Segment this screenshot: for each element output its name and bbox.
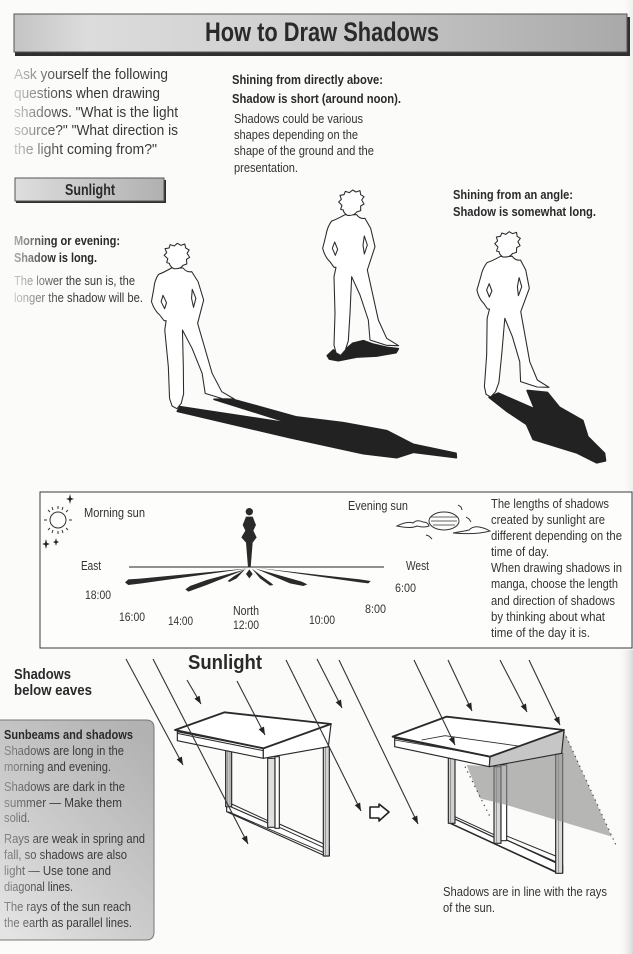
compass and hour labels: 14:00 xyxy=(168,616,193,628)
diagram explanation text: by thinking about what xyxy=(491,609,605,624)
intro text: Ask yourself the following xyxy=(14,66,168,83)
compass and hour labels: East xyxy=(81,558,101,573)
text: shining from directly above: Shadows could be various xyxy=(234,111,363,126)
panel: sunbeams and shadows: Sunbeams and shadows xyxy=(4,728,133,742)
diagram explanation text: and direction of shadows xyxy=(491,593,615,608)
panel: sunbeams and shadows: The rays of the sun reach xyxy=(4,899,131,914)
radial shadows by hour xyxy=(125,568,371,592)
diagram explanation text: time of the day it is. xyxy=(491,625,590,640)
compass and hour labels: 18:00 xyxy=(85,590,111,602)
panel: sunbeams and shadows: Shadows are dark in the xyxy=(4,779,125,794)
figure with medium shadow xyxy=(473,232,605,463)
compass and hour labels: 16:00 xyxy=(119,612,145,624)
compass and hour labels: 10:00 xyxy=(309,615,335,627)
panel: sunbeams and shadows: fall, so shadows are also xyxy=(4,847,127,862)
title banner: How to Draw Shadows xyxy=(205,17,439,47)
compass and hour labels: 6:00 xyxy=(395,583,416,595)
text: shining from directly above xyxy=(232,73,401,175)
sunlight label bar: Sunlight xyxy=(65,182,116,199)
label: evening sun: Evening sun xyxy=(348,498,408,513)
diagram explanation text: created by sunlight are xyxy=(491,512,605,527)
window with eave, no shadow xyxy=(175,712,331,856)
text: shining from directly above: presentation. xyxy=(234,160,298,175)
figure with short shadow xyxy=(323,190,399,361)
intro text: shadows. "What is the light xyxy=(14,104,179,121)
text: morning or evening: Morning or evening: xyxy=(14,234,120,248)
panel: sunbeams and shadows: diagonal lines. xyxy=(4,879,73,894)
figure with long shadow xyxy=(147,243,456,458)
intro text xyxy=(14,66,179,158)
text: shining from directly above: shape of the ground and the xyxy=(234,143,374,158)
compass and hour labels: 12:00 xyxy=(233,620,259,632)
icon: evening sun with clouds xyxy=(397,505,490,539)
title banner xyxy=(14,14,630,56)
text: shining from directly above: shapes depending on the xyxy=(234,127,358,142)
cast shadow tone xyxy=(467,732,612,837)
icon: morning sun xyxy=(42,494,74,549)
panel: sunbeams and shadows: Shadows are long in the xyxy=(4,743,124,758)
text: morning or evening: The lower the sun is, the xyxy=(14,273,135,288)
text: shining from an angle: Shining from an angle: xyxy=(453,188,573,202)
text: shining from directly above: Shadow is short (around noon). xyxy=(232,92,401,106)
diagram explanation text: The lengths of shadows xyxy=(491,496,609,511)
text: shining from an angle xyxy=(453,188,596,219)
arrow between windows xyxy=(370,804,389,821)
panel: sunbeams and shadows: solid. xyxy=(4,810,30,825)
panel: sunbeams and shadows xyxy=(0,720,154,940)
text: shining from an angle: Shadow is somewhat long. xyxy=(453,205,596,219)
compass and hour labels: North xyxy=(233,604,259,618)
intro text: questions when drawing xyxy=(14,85,160,102)
diagram explanation text xyxy=(491,496,622,640)
diagram explanation text: time of day. xyxy=(491,544,549,559)
heading: shadows below eaves: Shadows xyxy=(14,667,71,683)
panel: sunbeams and shadows: morning and evening. xyxy=(4,759,111,774)
sun rays with arrowheads xyxy=(126,659,560,844)
text: morning or evening: longer the shadow will be. xyxy=(14,290,143,305)
heading: sunlight: Sunlight xyxy=(188,652,262,674)
intro text: source?" "What direction is xyxy=(14,122,178,139)
panel: sunbeams and shadows: light — Use tone and xyxy=(4,863,111,878)
compass and hour labels xyxy=(81,558,429,632)
compass and hour labels: 8:00 xyxy=(365,604,386,616)
caption: shadows in line with rays: Shadows are in line with the rays xyxy=(443,884,607,899)
caption: shadows in line with rays: of the sun. xyxy=(443,900,495,915)
panel: sunbeams and shadows: summer — Make them xyxy=(4,795,122,810)
heading: shadows below eaves xyxy=(14,667,92,699)
panel: sunbeams and shadows: the earth as parallel lines. xyxy=(4,915,132,930)
intro text: the light coming from?" xyxy=(14,141,157,158)
text: morning or evening xyxy=(14,234,143,305)
text: shining from directly above: Shining from directly above: xyxy=(232,73,383,87)
text: morning or evening: Shadow is long. xyxy=(14,251,97,265)
silhouette of a standing woman xyxy=(241,508,257,567)
horizon line xyxy=(129,566,384,568)
heading: shadows below eaves: below eaves xyxy=(14,683,92,699)
sunlight label bar xyxy=(15,178,166,203)
caption: shadows in line with rays xyxy=(443,884,607,915)
label: morning sun: Morning sun xyxy=(84,505,145,520)
compass and hour labels: West xyxy=(406,558,429,573)
window with eave and cast shadow xyxy=(393,717,617,873)
panel: sunbeams and shadows: Rays are weak in spring and xyxy=(4,831,145,846)
sun path diagram panel xyxy=(40,492,632,648)
